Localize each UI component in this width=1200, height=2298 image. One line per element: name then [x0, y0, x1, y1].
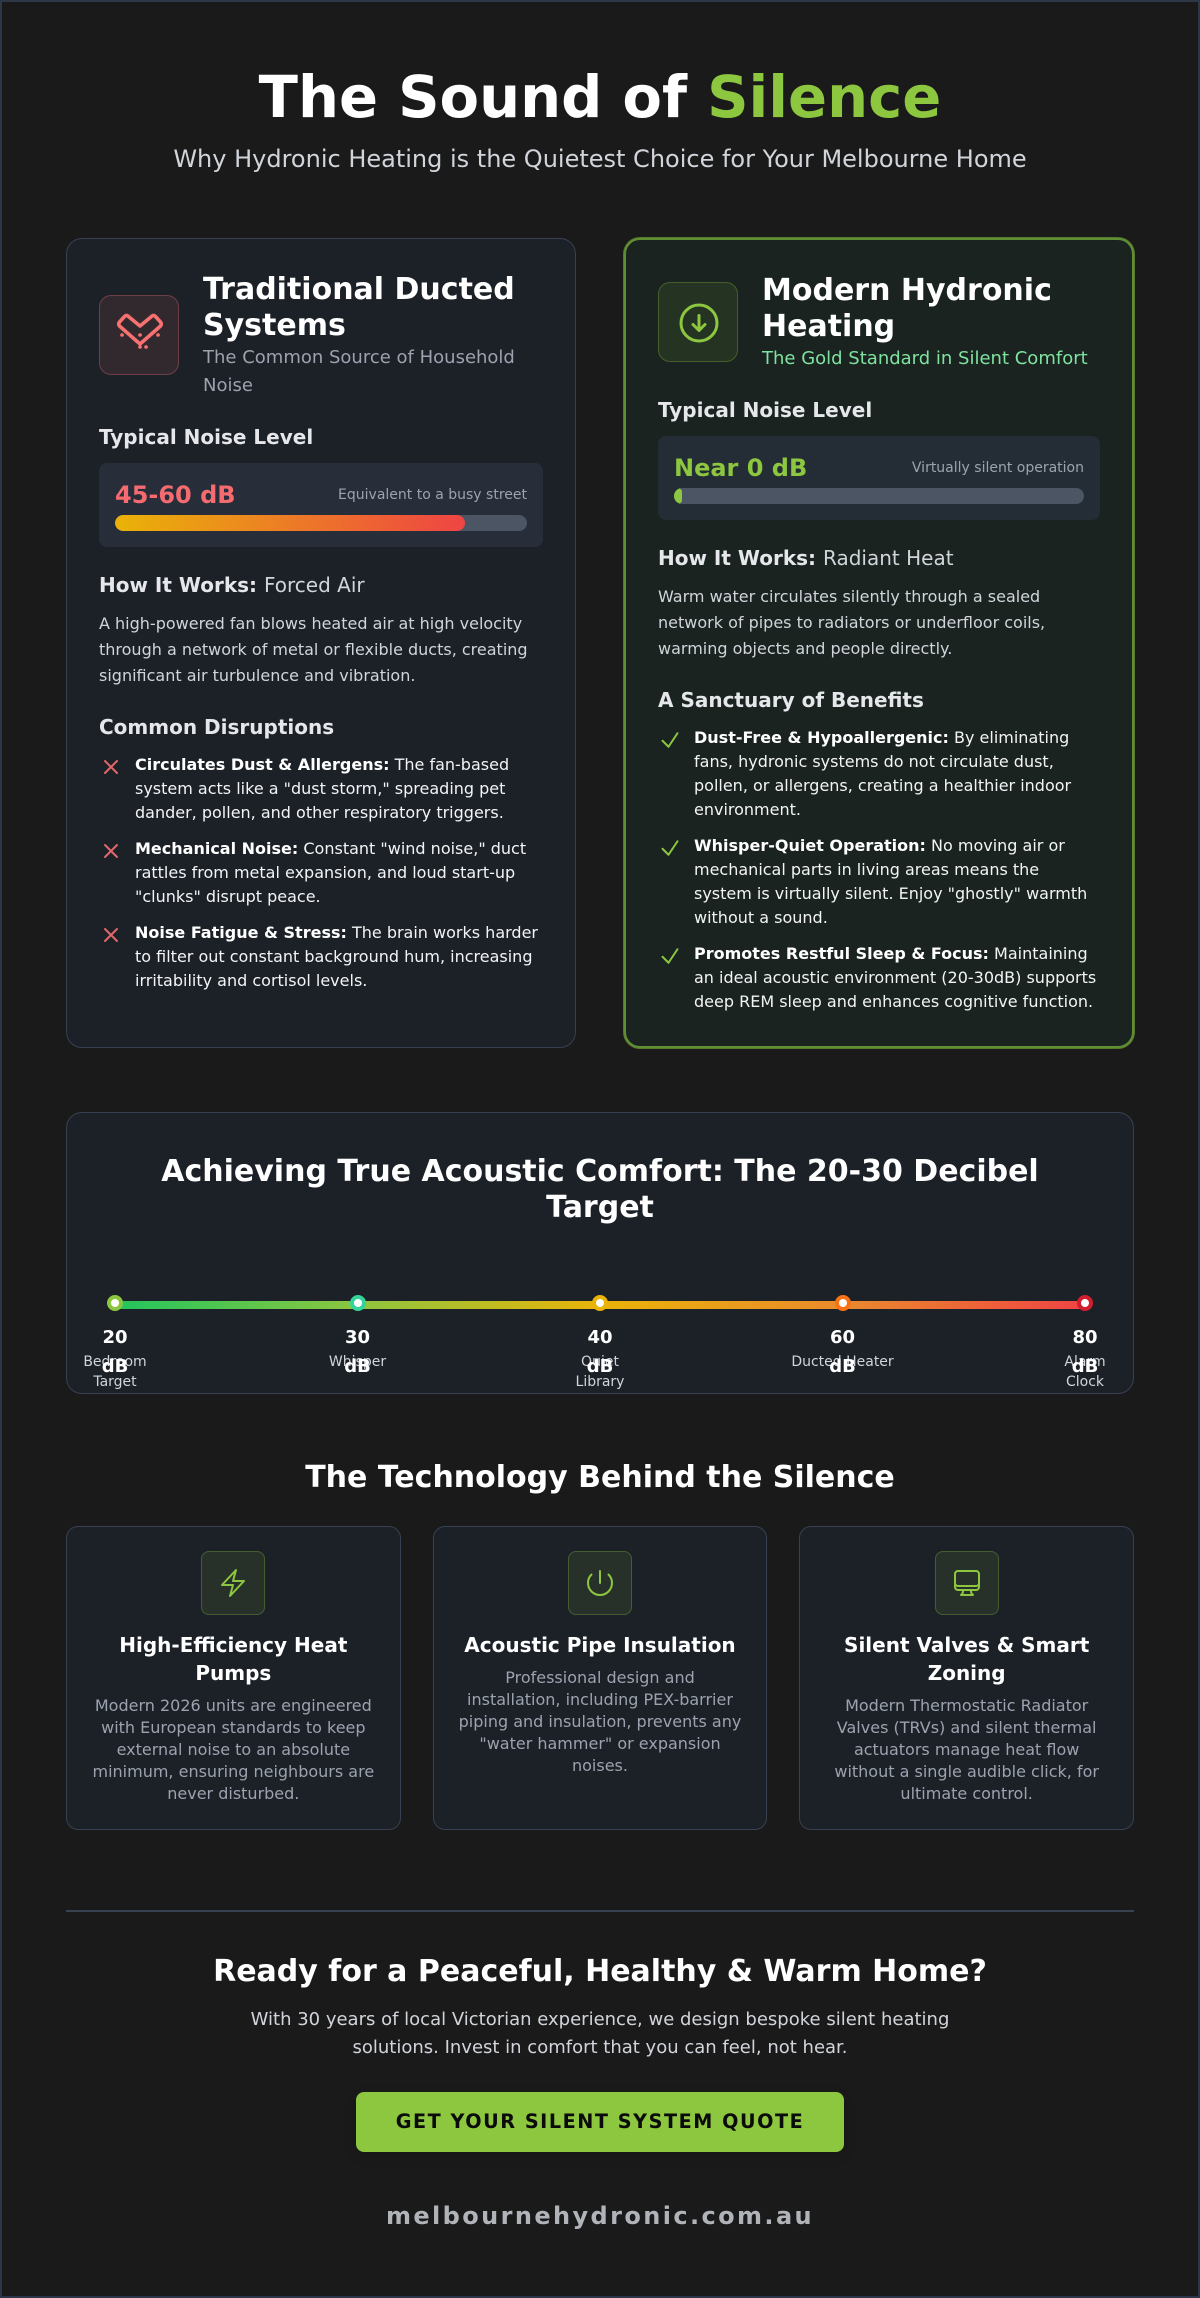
- label: alarm clock: Clock: [1066, 1374, 1104, 1390]
- panel title: Traditional Ducted Systems: [203, 272, 515, 343]
- label: alarm clock: [1064, 1354, 1106, 1390]
- heading: benefits: A Sanctuary of Benefits: [658, 688, 924, 712]
- header: [173, 64, 1027, 173]
- card title: Acoustic Pipe Insulation: [464, 1633, 736, 1657]
- panel title: [202, 272, 515, 396]
- heading: disruptions: Common Disruptions: [99, 715, 334, 739]
- card: heat pumps: [66, 1526, 401, 1830]
- heading: technology: The Technology Behind the Silence: [305, 1460, 895, 1495]
- label: bedroom target: [83, 1354, 147, 1390]
- technology cards: [66, 1526, 1134, 1830]
- panel title: The Gold Standard in Silent Comfort: [762, 348, 1088, 369]
- comparison panels: [66, 237, 1135, 1049]
- label: quiet library: Quiet: [581, 1354, 619, 1370]
- title: The Sound of Silence: [259, 64, 941, 131]
- noise bar: [115, 515, 527, 531]
- panel: traditional ducted systems: [66, 238, 576, 1048]
- card text: Modern Thermostatic Radiator Valves (TRVs) and silent thermal actuators manage heat flow without a single audible click, for ultimate control.: [834, 1696, 1099, 1803]
- noise value: Virtually silent operation: [912, 460, 1084, 476]
- panel header: [99, 272, 515, 396]
- card: valves and zoning: [799, 1526, 1134, 1830]
- noise value: Equivalent to a busy street: [338, 487, 527, 503]
- heading: noise level: Typical Noise Level: [99, 425, 313, 449]
- value: 20 dB: 20 dB: [102, 1327, 128, 1377]
- disruptions list: [104, 755, 538, 990]
- value: 30 dB: 30 dB: [344, 1327, 371, 1377]
- cta text: [251, 2009, 949, 2058]
- call to action: [213, 1954, 987, 2058]
- panel title: Modern Hydronic Heating: [762, 273, 1052, 344]
- icon: desktop: [935, 1551, 999, 1615]
- value: 60 dB: 60 dB: [829, 1327, 856, 1377]
- icon: bolt: [201, 1551, 265, 1615]
- label: ducted heater: Ducted Heater: [791, 1354, 894, 1370]
- website: melbournehydronic.com.au: [386, 2202, 814, 2230]
- marker: 30 dB: [350, 1295, 366, 1311]
- benefit: dust-free: Dust-Free & Hypoallergenic: By eliminating fans, hydronic systems do not circulate dust, pollen, or allergens, creating a healthier indoor environment.: [694, 728, 1071, 819]
- button: GET YOUR SILENT SYSTEM QUOTE: [396, 2110, 804, 2133]
- noise value: [115, 481, 527, 509]
- heading: noise level: Typical Noise Level: [658, 398, 872, 422]
- heading: [161, 1154, 1039, 1225]
- cta heading: Ready for a Peaceful, Healthy & Warm Home?: [213, 1954, 987, 1989]
- description: A high-powered fan blows heated air at high velocity through a network of metal or flexible ducts, creating significant air turbulence and vibration.: [99, 614, 528, 685]
- label: quiet library: [576, 1354, 624, 1390]
- benefit: whisper-quiet: Whisper-Quiet Operation: No moving air or mechanical parts in living areas means the system is virtually silent. Enjoy "ghostly" warmth without a sound.: [694, 836, 1087, 927]
- disruption: mechanical noise: Mechanical Noise: Constant "wind noise," duct rattles from metal expansion, and loud start-up "clunks" disrupt peace.: [135, 839, 526, 906]
- noise value: Near 0 dB: [674, 454, 807, 482]
- disruption: fatigue: Noise Fatigue & Stress: The brain works harder to filter out constant background hum, increasing irritability and cortisol levels.: [135, 923, 538, 990]
- noise bar: [674, 488, 1084, 504]
- heading: Achieving True Acoustic Comfort: The 20-30 Decibel: [161, 1154, 1039, 1189]
- icon: arrow down circle: [658, 282, 738, 362]
- value: 80 dB: 80 dB: [1072, 1327, 1098, 1377]
- card: pipe insulation: [433, 1526, 767, 1830]
- disruption: dust: Circulates Dust & Allergens: The fan-based system acts like a "dust storm," spreading pet dander, pollen, and other respiratory triggers.: [135, 755, 509, 822]
- decibel gradient bar: [115, 1301, 1085, 1309]
- description: Warm water circulates silently through a sealed network of pipes to radiators or underfloor coils, warming objects and people directly.: [658, 587, 1045, 658]
- panel title: The Common Source of Household Noise: [203, 347, 515, 396]
- benefits list: [662, 728, 1096, 1011]
- noise meter: [99, 463, 543, 547]
- heading: Target: [546, 1190, 654, 1225]
- value: 40 dB: 40 dB: [587, 1327, 613, 1377]
- label: bedroom target: Bedroom: [83, 1354, 147, 1370]
- subtitle: Why Hydronic Heating is the Quietest Choice for Your Melbourne Home: [173, 145, 1027, 173]
- card text: Modern 2026 units are engineered with European standards to keep external noise to an absolute minimum, ensuring neighbours are never disturbed.: [92, 1696, 374, 1803]
- marker: 80 dB: [1077, 1295, 1093, 1311]
- marker: 20 dB: [107, 1295, 123, 1311]
- card text: Professional design and installation, including PEX-barrier piping and insulation, prevents any "water hammer" or expansion noises.: [459, 1668, 741, 1775]
- heading: how it works: How It Works: Radiant Heat: [658, 546, 954, 570]
- card title: Silent Valves & Smart Zoning: [844, 1633, 1089, 1685]
- benefit: restful sleep: Promotes Restful Sleep & Focus: Maintaining an ideal acoustic environment (20-30dB) supports deep REM sleep and enhances cognitive function.: [694, 944, 1096, 1011]
- label: whisper: Whisper: [329, 1354, 386, 1370]
- heading: how it works: How It Works: Forced Air: [99, 573, 365, 597]
- panel title: [762, 273, 1088, 369]
- noise meter: [658, 436, 1100, 520]
- cta text: With 30 years of local Victorian experience, we design bespoke silent heating: [251, 2009, 949, 2030]
- marker: 40 dB: [592, 1295, 608, 1311]
- panel: modern hydronic heating: [624, 238, 1134, 1048]
- label: alarm clock: Alarm: [1064, 1354, 1106, 1370]
- cta text: solutions. Invest in comfort that you can feel, not hear.: [352, 2037, 848, 2058]
- icon: cracked heart: [99, 295, 179, 375]
- card title: High-Efficiency Heat Pumps: [119, 1633, 347, 1685]
- label: quiet library: Library: [576, 1374, 624, 1390]
- noise value: 45-60 dB: [115, 481, 236, 509]
- label: bedroom target: Target: [93, 1374, 137, 1390]
- marker: 60 dB: [834, 1295, 850, 1311]
- icon: power: [568, 1551, 632, 1615]
- panel header: [658, 273, 1088, 369]
- panel: decibel scale: [66, 1112, 1134, 1394]
- noise value: [674, 454, 1084, 482]
- button: [356, 2092, 844, 2152]
